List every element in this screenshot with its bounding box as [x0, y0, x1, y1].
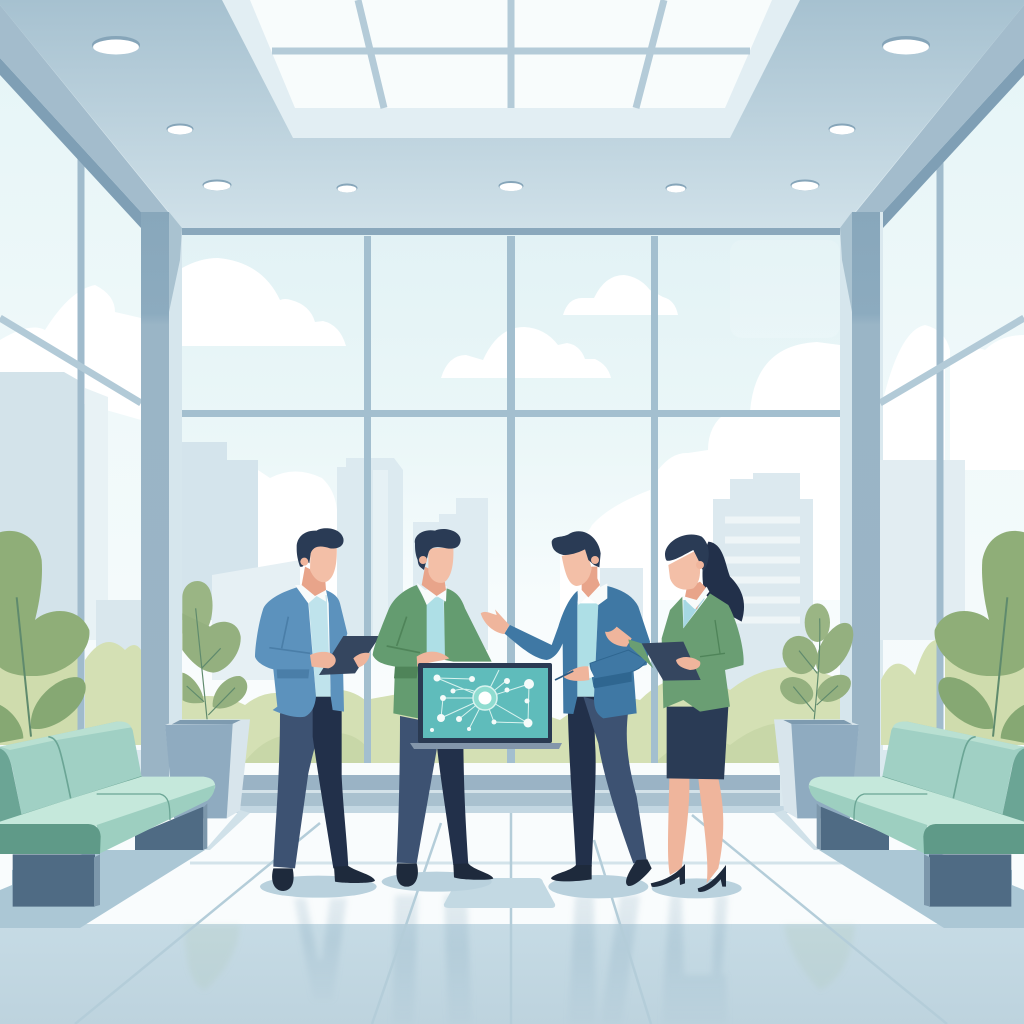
left column — [141, 212, 182, 777]
ceiling — [0, 0, 1024, 228]
person 3: dark blue jacket gesturing — [481, 531, 652, 898]
right bench, pot and big plant — [774, 531, 1024, 907]
center window mullions — [182, 228, 840, 766]
skylight — [222, 0, 800, 138]
person 1: blue jacket with tablet — [255, 528, 380, 898]
left window — [0, 58, 141, 750]
left small plant — [182, 581, 247, 722]
laptop with network diagram — [410, 663, 562, 749]
window sill — [182, 763, 840, 813]
right column — [840, 212, 880, 777]
left bench, pot and big plant — [0, 531, 250, 907]
person 4: woman in green jacket with tablet — [605, 535, 744, 898]
center window: sky, clouds, skyline — [182, 228, 840, 768]
right small plant — [776, 603, 861, 722]
people group right — [481, 531, 744, 898]
floor — [0, 810, 1024, 1024]
person 2: green jacket — [373, 529, 493, 892]
right window — [880, 58, 1024, 750]
people group left — [255, 528, 493, 898]
ceiling lights — [92, 36, 930, 192]
